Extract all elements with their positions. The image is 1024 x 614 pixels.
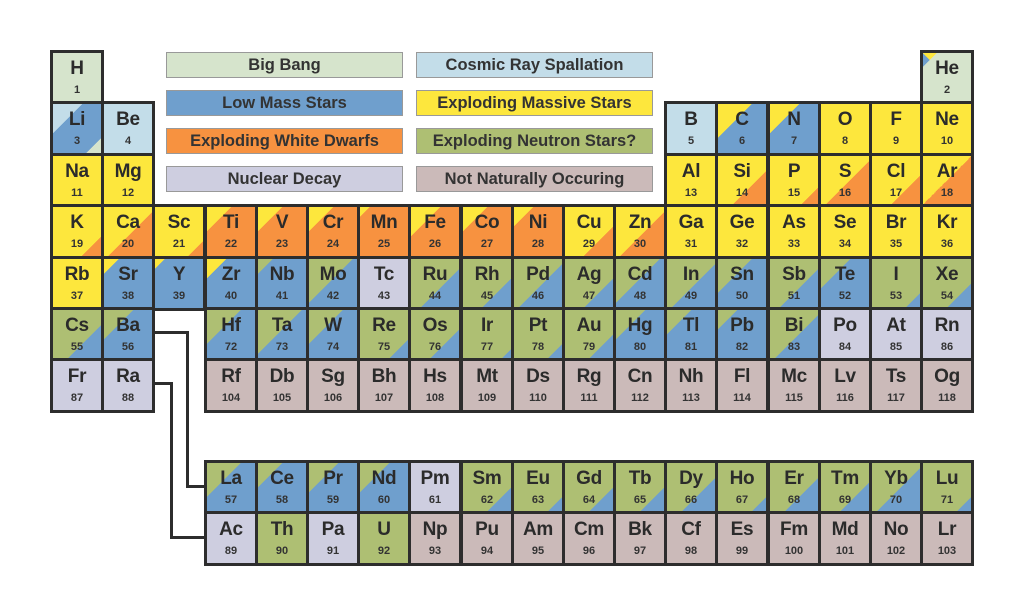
- periodic table: Lr: [938, 519, 956, 540]
- periodic table: Md: [832, 519, 858, 540]
- legend: Nuclear Decay: Nuclear Decay: [228, 170, 341, 188]
- periodic table: Ba: [116, 315, 140, 336]
- periodic table: 112: [631, 392, 649, 404]
- periodic table: Ra: [116, 366, 140, 387]
- actinides: [204, 511, 258, 566]
- periodic table: Pm: [421, 468, 449, 489]
- periodic table: 16: [839, 187, 851, 199]
- periodic table: Am: [523, 519, 553, 540]
- periodic table: Tc: [374, 264, 394, 285]
- periodic table: 67: [736, 494, 748, 506]
- periodic table: 107: [375, 392, 393, 404]
- lanthanides: [204, 460, 258, 515]
- periodic table: 81: [685, 341, 697, 353]
- periodic table: At: [886, 315, 906, 336]
- periodic table: Eu: [526, 468, 550, 489]
- periodic table: 4: [125, 135, 131, 147]
- periodic table: P: [788, 161, 800, 182]
- periodic table: Br: [886, 212, 906, 233]
- periodic table: 54: [941, 290, 953, 302]
- periodic table: 36: [941, 238, 953, 250]
- periodic table: 18: [941, 187, 953, 199]
- periodic table: Fm: [780, 519, 808, 540]
- periodic table: Cf: [681, 519, 701, 540]
- actinides: Ac: [219, 519, 243, 540]
- periodic table: Np: [423, 519, 447, 540]
- periodic table: 104: [222, 392, 240, 404]
- periodic table: Rf: [221, 366, 241, 387]
- periodic table: 62: [481, 494, 493, 506]
- periodic table: Lv: [834, 366, 856, 387]
- periodic table: Ni: [529, 212, 547, 233]
- periodic table: F: [890, 109, 902, 130]
- periodic table: Mo: [320, 264, 346, 285]
- periodic table: Zn: [629, 212, 651, 233]
- legend: Exploding Massive Stars: [416, 90, 653, 116]
- row 1: H: [70, 58, 84, 79]
- periodic table: Hs: [423, 366, 447, 387]
- legend: Big Bang: [166, 52, 403, 78]
- periodic table: Rn: [935, 315, 959, 336]
- periodic table: 15: [788, 187, 800, 199]
- periodic table: Es: [731, 519, 753, 540]
- legend: Nuclear Decay: [166, 166, 403, 192]
- periodic table: 60: [378, 494, 390, 506]
- periodic table: Pu: [475, 519, 499, 540]
- row 7: Fr: [68, 366, 86, 387]
- periodic table: No: [884, 519, 908, 540]
- periodic table: 82: [736, 341, 748, 353]
- periodic table: Cd: [628, 264, 652, 285]
- periodic table: Si: [733, 161, 751, 182]
- periodic table: Ce: [270, 468, 294, 489]
- periodic table: Po: [833, 315, 857, 336]
- periodic table: 25: [378, 238, 390, 250]
- periodic table: S: [839, 161, 851, 182]
- periodic table: 5: [688, 135, 694, 147]
- row 5: Rb: [65, 264, 89, 285]
- periodic table: 72: [225, 341, 237, 353]
- periodic table: 101: [836, 545, 854, 557]
- row 4: [50, 204, 104, 259]
- periodic table: 108: [426, 392, 444, 404]
- periodic table: 44: [429, 290, 441, 302]
- periodic table: 95: [532, 545, 544, 557]
- periodic table: 74: [327, 341, 339, 353]
- legend: Exploding Massive Stars: Exploding Massive Stars: [437, 94, 632, 112]
- periodic table: 68: [788, 494, 800, 506]
- periodic table: 98: [685, 545, 697, 557]
- periodic table: Cn: [628, 366, 652, 387]
- periodic table: Er: [784, 468, 804, 489]
- periodic table: 65: [634, 494, 646, 506]
- periodic table: 27: [481, 238, 493, 250]
- periodic table: 9: [893, 135, 899, 147]
- periodic table: Yb: [884, 468, 908, 489]
- periodic table: Ga: [679, 212, 703, 233]
- periodic table: 45: [481, 290, 493, 302]
- row 5: 37: [71, 290, 83, 302]
- periodic table: Mg: [115, 161, 141, 182]
- periodic table: 115: [785, 392, 803, 404]
- periodic table: Mc: [781, 366, 807, 387]
- periodic table: 91: [327, 545, 339, 557]
- periodic table: Th: [271, 519, 293, 540]
- periodic table: 61: [429, 494, 441, 506]
- periodic table: W: [324, 315, 342, 336]
- legend: Big Bang: Big Bang: [248, 56, 321, 74]
- periodic table: Nh: [679, 366, 703, 387]
- row 7: 87: [71, 392, 83, 404]
- periodic table: Dy: [679, 468, 703, 489]
- periodic table: 76: [429, 341, 441, 353]
- periodic table: Xe: [936, 264, 958, 285]
- periodic table: 2: [944, 84, 950, 96]
- periodic table: 110: [529, 392, 547, 404]
- periodic table: 86: [941, 341, 953, 353]
- periodic table: Pt: [529, 315, 547, 336]
- periodic table: 103: [938, 545, 956, 557]
- periodic table: Fl: [734, 366, 750, 387]
- periodic table: 22: [225, 238, 237, 250]
- row 1: 1: [74, 84, 80, 96]
- periodic table: 14: [736, 187, 748, 199]
- periodic table: Ar: [937, 161, 957, 182]
- periodic table: 59: [327, 494, 339, 506]
- periodic table: 20: [122, 238, 134, 250]
- periodic table: 77: [481, 341, 493, 353]
- periodic table: Ge: [730, 212, 754, 233]
- periodic table: 70: [890, 494, 902, 506]
- periodic table: Zr: [222, 264, 240, 285]
- periodic table: 109: [478, 392, 496, 404]
- periodic table: Hf: [221, 315, 241, 336]
- periodic table: 53: [890, 290, 902, 302]
- periodic table: As: [782, 212, 806, 233]
- periodic table: 8: [842, 135, 848, 147]
- periodic table: 42: [327, 290, 339, 302]
- legend: Not Naturally Occuring: Not Naturally Occuring: [445, 170, 624, 188]
- periodic table: Co: [475, 212, 499, 233]
- periodic table: 38: [122, 290, 134, 302]
- periodic table: [50, 50, 974, 566]
- periodic table: 85: [890, 341, 902, 353]
- periodic table: 51: [788, 290, 800, 302]
- periodic table: 33: [788, 238, 800, 250]
- periodic table: 94: [481, 545, 493, 557]
- periodic table: 39: [173, 290, 185, 302]
- periodic table: 71: [941, 494, 953, 506]
- periodic table: 64: [583, 494, 595, 506]
- periodic table: Tl: [683, 315, 699, 336]
- periodic table: 17: [890, 187, 902, 199]
- periodic table: Al: [682, 161, 700, 182]
- periodic table: 66: [685, 494, 697, 506]
- periodic table: V: [276, 212, 288, 233]
- periodic table: 84: [839, 341, 851, 353]
- periodic table: 117: [887, 392, 905, 404]
- row 1: [50, 50, 104, 105]
- periodic table: 10: [941, 135, 953, 147]
- periodic table: C: [735, 109, 749, 130]
- connector: actinides: [155, 382, 204, 539]
- periodic table: 63: [532, 494, 544, 506]
- periodic table: 47: [583, 290, 595, 302]
- periodic table: N: [787, 109, 801, 130]
- periodic table: Rh: [475, 264, 499, 285]
- legend: Exploding White Dwarfs: [166, 128, 403, 154]
- row 7: [50, 358, 104, 413]
- periodic table: Pa: [322, 519, 344, 540]
- row 3: Na: [65, 161, 89, 182]
- periodic table: Fe: [424, 212, 446, 233]
- legend: Low Mass Stars: [166, 90, 403, 116]
- periodic table: Sb: [782, 264, 806, 285]
- periodic table: 7: [791, 135, 797, 147]
- periodic table: Cr: [323, 212, 343, 233]
- periodic table: 21: [173, 238, 185, 250]
- periodic table: Bk: [628, 519, 652, 540]
- periodic table: Pb: [730, 315, 754, 336]
- periodic table: 102: [887, 545, 905, 557]
- periodic table: 24: [327, 238, 339, 250]
- periodic table: 28: [532, 238, 544, 250]
- periodic table: Se: [834, 212, 856, 233]
- periodic table: 58: [276, 494, 288, 506]
- periodic table: Sn: [730, 264, 754, 285]
- periodic table: 75: [378, 341, 390, 353]
- periodic table: Hg: [628, 315, 652, 336]
- row 4: K: [70, 212, 84, 233]
- periodic table: 50: [736, 290, 748, 302]
- periodic table: Og: [934, 366, 960, 387]
- periodic table: Nd: [372, 468, 396, 489]
- periodic table: Ts: [886, 366, 906, 387]
- periodic table: Te: [835, 264, 855, 285]
- periodic table: 29: [583, 238, 595, 250]
- periodic table: 105: [273, 392, 291, 404]
- row 6: Cs: [65, 315, 89, 336]
- periodic table: 100: [785, 545, 803, 557]
- periodic table: 41: [276, 290, 288, 302]
- periodic table: Re: [372, 315, 396, 336]
- periodic table: Sc: [168, 212, 190, 233]
- periodic table: 43: [378, 290, 390, 302]
- periodic table: Gd: [576, 468, 602, 489]
- periodic table: 34: [839, 238, 851, 250]
- periodic table: Sg: [321, 366, 345, 387]
- row 6: 55: [71, 341, 83, 353]
- periodic table: In: [683, 264, 699, 285]
- periodic table: Mn: [371, 212, 397, 233]
- periodic table: 97: [634, 545, 646, 557]
- row 2: Li: [69, 109, 85, 130]
- periodic table: Mt: [476, 366, 498, 387]
- periodic table: Nb: [270, 264, 294, 285]
- periodic table: Bi: [785, 315, 803, 336]
- periodic table: 48: [634, 290, 646, 302]
- periodic table: 114: [733, 392, 751, 404]
- periodic table: Be: [116, 109, 140, 130]
- row 6: [50, 307, 104, 362]
- periodic table: U: [377, 519, 391, 540]
- legend: Exploding White Dwarfs: Exploding White Dwarfs: [190, 132, 379, 150]
- periodic table: 31: [685, 238, 697, 250]
- periodic table: 52: [839, 290, 851, 302]
- periodic table: 73: [276, 341, 288, 353]
- periodic table: Sm: [473, 468, 501, 489]
- legend: Low Mass Stars: Low Mass Stars: [222, 94, 347, 112]
- periodic table: 92: [378, 545, 390, 557]
- actinides: 89: [225, 545, 237, 557]
- periodic table: Au: [577, 315, 601, 336]
- periodic table: Lu: [936, 468, 958, 489]
- periodic table: Kr: [937, 212, 957, 233]
- legend: [166, 52, 653, 192]
- legend: Exploding Neutron Stars: [416, 128, 653, 154]
- row 2: 3: [74, 135, 80, 147]
- periodic table: 35: [890, 238, 902, 250]
- periodic table: 93: [429, 545, 441, 557]
- periodic table: Tb: [629, 468, 651, 489]
- periodic table: Ru: [423, 264, 447, 285]
- periodic table: Ag: [577, 264, 601, 285]
- periodic table: 30: [634, 238, 646, 250]
- periodic table: Ds: [526, 366, 550, 387]
- periodic table: Ir: [481, 315, 493, 336]
- periodic table: Ho: [730, 468, 754, 489]
- periodic table: Cl: [887, 161, 905, 182]
- periodic table: Cu: [577, 212, 601, 233]
- periodic table: B: [684, 109, 698, 130]
- periodic table: I: [894, 264, 898, 285]
- periodic table: 69: [839, 494, 851, 506]
- periodic table: Pd: [526, 264, 550, 285]
- periodic table: Sr: [118, 264, 138, 285]
- periodic table: 116: [836, 392, 854, 404]
- periodic table: 56: [122, 341, 134, 353]
- periodic table: 12: [122, 187, 134, 199]
- periodic table: Os: [423, 315, 447, 336]
- periodic table: 23: [276, 238, 288, 250]
- periodic table: Bh: [372, 366, 396, 387]
- row 2: [50, 101, 104, 156]
- periodic table: 118: [938, 392, 956, 404]
- periodic table: Y: [173, 264, 185, 285]
- periodic table: 88: [122, 392, 134, 404]
- periodic table: O: [838, 109, 852, 130]
- legend: Cosmic Ray Spallation: Cosmic Ray Spallation: [446, 56, 623, 74]
- periodic table: 78: [532, 341, 544, 353]
- periodic table: 106: [324, 392, 342, 404]
- periodic table: Ca: [116, 212, 140, 233]
- legend: Not Naturally Occuring: [416, 166, 653, 192]
- periodic table: Cm: [574, 519, 604, 540]
- periodic table: Ti: [223, 212, 239, 233]
- legend: Exploding Neutron Stars: Exploding Neutron Stars?: [433, 132, 636, 150]
- periodic table: 83: [788, 341, 800, 353]
- periodic table: 26: [429, 238, 441, 250]
- periodic table: 99: [736, 545, 748, 557]
- periodic table: Tm: [831, 468, 859, 489]
- periodic table: 32: [736, 238, 748, 250]
- row 3: 11: [71, 187, 83, 199]
- periodic table: 90: [276, 545, 288, 557]
- periodic table: 79: [583, 341, 595, 353]
- periodic table: Ta: [272, 315, 292, 336]
- periodic table: 6: [739, 135, 745, 147]
- periodic table: 49: [685, 290, 697, 302]
- legend: Cosmic Ray Spallation: [416, 52, 653, 78]
- periodic table: 111: [580, 392, 598, 404]
- periodic table: Db: [270, 366, 294, 387]
- periodic table: 40: [225, 290, 237, 302]
- periodic table: Pr: [323, 468, 343, 489]
- row 3: [50, 153, 104, 208]
- row 4: 19: [71, 238, 83, 250]
- periodic table: 96: [583, 545, 595, 557]
- lanthanides: La: [220, 468, 242, 489]
- row 5: [50, 256, 104, 311]
- periodic table: He: [935, 58, 959, 79]
- periodic table: 113: [682, 392, 700, 404]
- periodic table: Rg: [577, 366, 601, 387]
- periodic table: 46: [532, 290, 544, 302]
- lanthanides: 57: [225, 494, 237, 506]
- periodic table: 80: [634, 341, 646, 353]
- periodic table: 13: [685, 187, 697, 199]
- periodic table: Ne: [935, 109, 959, 130]
- connector: lanthanides: [155, 331, 204, 488]
